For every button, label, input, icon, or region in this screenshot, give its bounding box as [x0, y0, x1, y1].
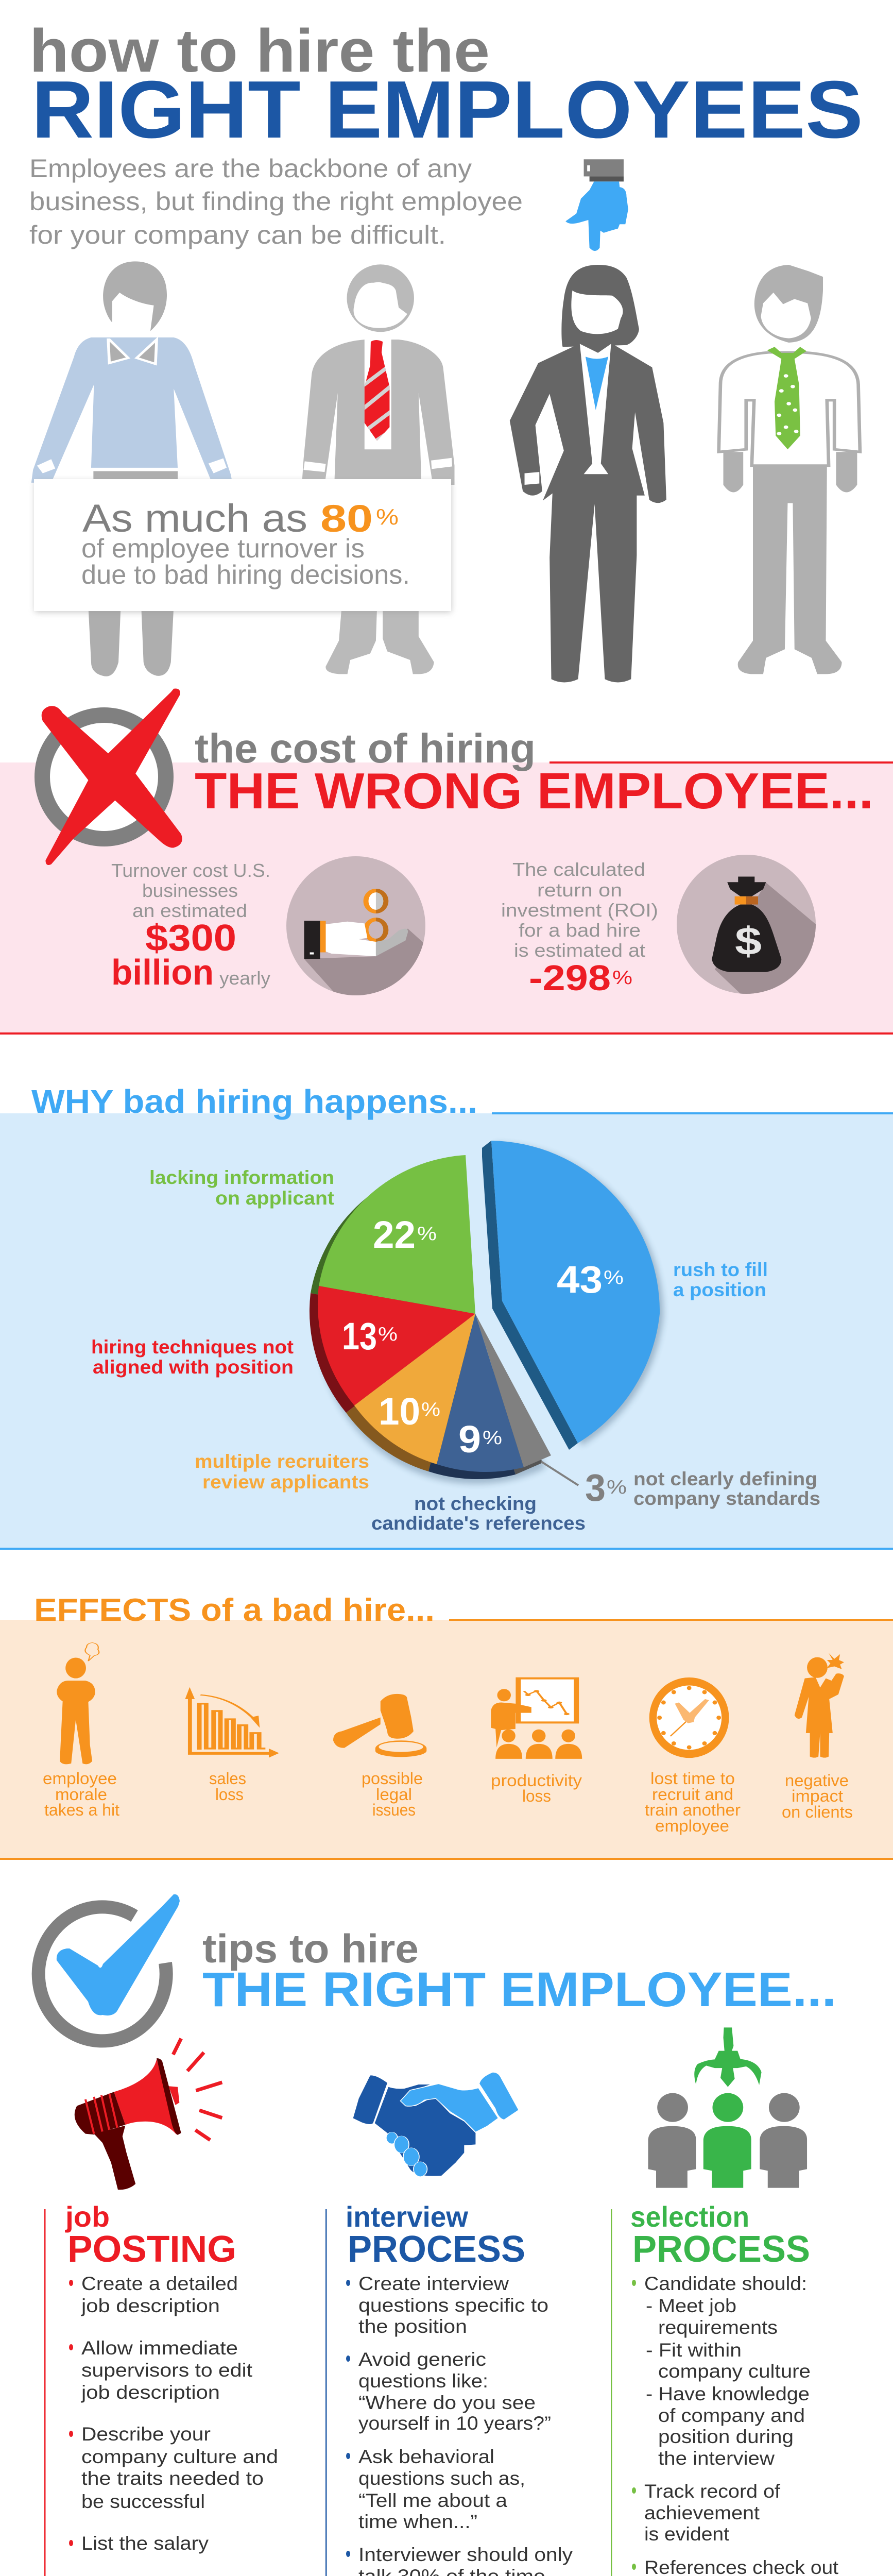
pie labels: [91, 1167, 820, 1534]
effects labels: negative: [785, 1771, 849, 1790]
column: interview process: PROCESS: [348, 2229, 525, 2270]
callout: 80 percent of turnover: due to bad hiring decisions.: [81, 560, 410, 590]
icon: handshake: [353, 2073, 518, 2177]
column: job posting: List the salary: [81, 2533, 209, 2554]
heading: tips to hire the right employee: tips to hire: [202, 1926, 419, 1971]
pie chart: 10: [379, 1390, 420, 1433]
heading: effects of a bad hire: EFFECTS of a bad hire...: [34, 1592, 435, 1628]
stat: turnover cost: an estimated: [132, 900, 247, 921]
effects labels: train another: [645, 1801, 741, 1819]
person: gray suit with red tie: [302, 264, 455, 674]
heading: the cost of hiring the wrong employee: the cost of hiring: [195, 725, 536, 771]
column: job posting: job: [65, 2200, 110, 2233]
column: selection process: position during: [658, 2426, 794, 2447]
callout: 80 percent of turnover: %: [376, 504, 399, 530]
pie chart: %: [417, 1223, 437, 1245]
effects labels: productivity: [491, 1771, 582, 1790]
title: how to hire the right employees: how to hire the: [29, 17, 490, 85]
column: selection process: selection: [630, 2200, 749, 2233]
heading: the cost of hiring the wrong employee: [195, 725, 873, 819]
pie labels: aligned with position: [93, 1357, 294, 1378]
column: interview process: Interviewer should only: [358, 2544, 573, 2565]
column: job posting: supervisors to edit: [81, 2360, 253, 2381]
panel: why bad hiring happens background: [0, 1112, 893, 1550]
effects labels: [43, 1769, 853, 1835]
effects labels: loss: [522, 1787, 551, 1805]
pie chart: [310, 1141, 663, 1485]
column: interview process: questions like:: [358, 2370, 488, 2392]
icon: pointing hand: [565, 159, 628, 251]
stat: return on investment: return on: [537, 879, 622, 901]
effects labels: legal: [376, 1785, 412, 1804]
column: interview process: [325, 2200, 573, 2576]
panel: effects of a bad hire background: [0, 1619, 893, 1860]
callout: 80 percent of turnover: of employee turnover is: [81, 534, 365, 564]
heading: the cost of hiring the wrong employee: THE WRONG EMPLOYEE...: [195, 762, 873, 819]
column: interview process: “Tell me about a: [358, 2490, 507, 2511]
column: selection process: - Fit within: [646, 2340, 742, 2361]
icon: presenter with audience: [491, 1679, 582, 1759]
column: job posting: company culture and: [81, 2446, 278, 2467]
effects labels: recruit and: [652, 1785, 733, 1804]
effects labels: employee: [655, 1817, 729, 1835]
pie labels: candidate's references: [371, 1513, 586, 1534]
column: selection process: - Meet job: [646, 2295, 736, 2316]
column: interview process: Ask behavioral: [358, 2446, 494, 2467]
icon: falling sales chart: [185, 1687, 279, 1758]
effects labels: lost time to: [650, 1769, 735, 1788]
icon: check mark in ring: [39, 1894, 180, 2041]
person: white shirt with green tie: [719, 265, 860, 674]
column: interview process: “Where do you see: [358, 2392, 536, 2413]
pie labels: not checking: [414, 1493, 537, 1514]
column: job posting: the traits needed to: [81, 2468, 264, 2489]
icon: money bag: $: [735, 920, 762, 963]
icon: red X over ring: [42, 688, 182, 865]
column: selection process: company culture: [658, 2361, 811, 2382]
effects labels: possible: [362, 1769, 423, 1788]
icon: gavel: [333, 1694, 426, 1757]
column: interview process: Create interview: [358, 2273, 509, 2294]
heading: tips to hire the right employee: [202, 1926, 836, 2017]
icon: people and selecting claw: [648, 2027, 807, 2188]
pie labels: rush to fill: [673, 1259, 768, 1280]
pie chart: 22: [373, 1213, 416, 1256]
person: blue sweater: [31, 261, 232, 676]
effects labels: loss: [215, 1785, 244, 1804]
icon: clock: [649, 1677, 729, 1758]
intro text: for your company can be difficult.: [29, 221, 446, 249]
column: interview process: the position: [358, 2316, 467, 2337]
pie chart: %: [483, 1427, 502, 1449]
column: selection process: of company and: [658, 2405, 805, 2426]
pie chart: %: [421, 1399, 440, 1420]
stat: turnover cost: Turnover cost U.S.: [111, 860, 270, 881]
effects labels: morale: [55, 1785, 107, 1804]
callout: 80 percent of turnover: [34, 479, 451, 612]
pie labels: multiple recruiters: [195, 1451, 369, 1472]
pie labels: review applicants: [202, 1471, 369, 1493]
column: interview process: Avoid generic: [358, 2349, 486, 2370]
pie labels: 3: [585, 1466, 606, 1509]
title: how to hire the right employees: [29, 17, 863, 155]
heading: why bad hiring happens: WHY bad hiring happens...: [31, 1083, 477, 1120]
column: interview process: questions specific to: [358, 2295, 548, 2316]
pie labels: not clearly defining: [633, 1468, 817, 1489]
column: selection process: [611, 2200, 839, 2576]
icon: money bag: [677, 855, 816, 994]
stat: return on investment: investment (ROI): [501, 900, 658, 921]
column: job posting: Describe your: [81, 2424, 211, 2445]
stat: turnover cost: [111, 860, 270, 992]
column: job posting: job description: [81, 2295, 220, 2316]
pie labels: hiring techniques not: [91, 1336, 294, 1358]
effects labels: impact: [792, 1787, 843, 1805]
column: selection process: Track record of: [644, 2481, 781, 2502]
intro text: [29, 154, 523, 249]
intro text: Employees are the backbone of any: [29, 154, 472, 183]
pie labels: a position: [673, 1279, 766, 1300]
stat: return on investment: for a bad hire: [519, 920, 641, 941]
pie chart: 43: [557, 1258, 603, 1301]
column: job posting: be successful: [81, 2491, 205, 2512]
column: job posting: Allow immediate: [81, 2337, 238, 2359]
column: selection process: the interview: [658, 2448, 775, 2469]
effects labels: issues: [372, 1801, 416, 1819]
column: selection process: achievement: [644, 2502, 760, 2523]
column: interview process: yourself in 10 years?”: [358, 2413, 551, 2434]
icon: megaphone: [75, 2039, 222, 2190]
heading: tips to hire the right employee: THE RIGHT EMPLOYEE...: [202, 1962, 836, 2017]
effects labels: employee: [43, 1769, 117, 1788]
column: selection process: - Have knowledge: [646, 2383, 810, 2404]
column: interview process: questions such as,: [358, 2468, 525, 2489]
column: interview process: time when...”: [358, 2511, 477, 2532]
pie chart: %: [378, 1324, 398, 1345]
column: selection process: PROCESS: [632, 2229, 810, 2270]
stat: turnover cost: $300: [145, 918, 236, 959]
column: interview process: interview: [346, 2200, 468, 2233]
stat: return on investment: The calculated: [512, 859, 645, 880]
intro text: business, but finding the right employee: [29, 187, 523, 216]
pie labels: lacking information: [149, 1167, 334, 1188]
column: job posting: POSTING: [67, 2229, 236, 2270]
effects labels: sales: [209, 1769, 246, 1788]
column: job posting: [44, 2200, 296, 2576]
stat: return on investment: [501, 859, 658, 998]
column: job posting: job description: [81, 2382, 220, 2403]
callout: 80 percent of turnover: As much as: [82, 497, 307, 540]
pie chart: 13: [342, 1315, 377, 1358]
stat: return on investment: %: [612, 967, 632, 989]
person: woman in dark suit: [510, 265, 666, 682]
effects labels: takes a hit: [44, 1801, 119, 1819]
column: selection process: is evident: [644, 2523, 730, 2545]
icon: woman with negative impact: [795, 1653, 844, 1758]
effects labels: on clients: [782, 1803, 853, 1821]
column: job posting: Create a detailed: [81, 2273, 238, 2294]
pie labels: on applicant: [215, 1188, 334, 1209]
stat: turnover cost: businesses: [142, 880, 238, 901]
pie labels: company standards: [633, 1488, 820, 1509]
stat: return on investment: is estimated at: [514, 940, 645, 961]
panel: cost of the wrong employee background: [0, 761, 893, 1035]
icon: hand with coins: [286, 856, 425, 995]
pie chart: %: [604, 1267, 624, 1289]
stat: turnover cost: billion: [111, 952, 214, 992]
column: selection process: requirements: [658, 2317, 778, 2338]
stat: turnover cost: yearly: [219, 968, 270, 989]
callout: 80 percent of turnover: 80: [320, 497, 373, 540]
pie labels: %: [607, 1477, 627, 1498]
title: how to hire the right employees: RIGHT EMPLOYEES: [31, 64, 863, 155]
column: selection process: Candidate should:: [644, 2273, 807, 2294]
pie chart: 9: [458, 1418, 481, 1461]
stat: return on investment: -298: [529, 958, 611, 998]
icon: employee with crossed arms: [57, 1642, 99, 1764]
